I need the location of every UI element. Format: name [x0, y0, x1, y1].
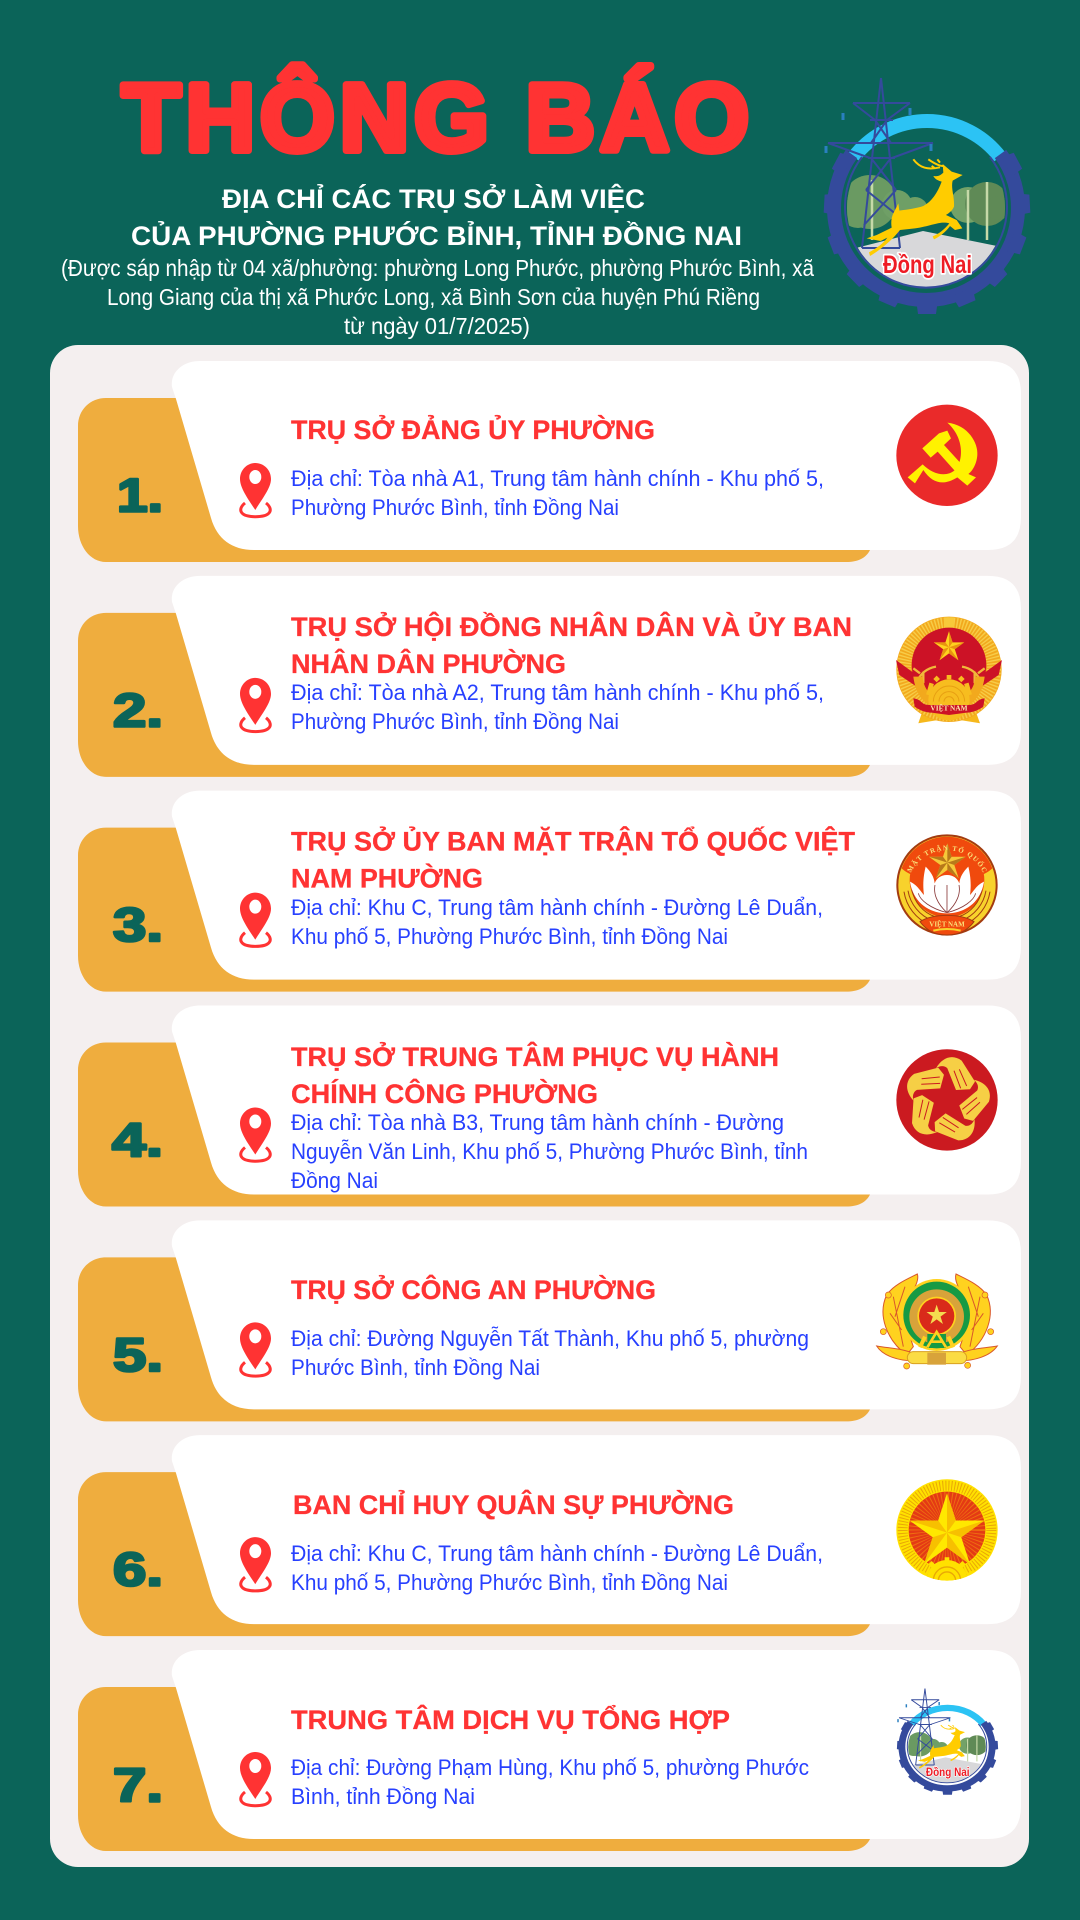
card 5: TRỤ SỞ CÔNG AN PHƯỜNG [291, 1273, 656, 1305]
card 2: Phường Phước Bình, tỉnh Đồng Nai [291, 709, 619, 734]
card 6: BAN CHỈ HUY QUÂN SỰ PHƯỜNG [293, 1488, 734, 1520]
card 4: CHÍNH CÔNG PHƯỜNG [291, 1078, 598, 1109]
card 3: TRỤ SỞ ỦY BAN MẶT TRẬN TỔ QUỐC VIỆT [291, 825, 855, 857]
note text: (Được sáp nhập từ 04 xã/phường: phường Long Phước, phường Phước Bình, xã [61, 255, 814, 281]
card 4: Địa chỉ: Tòa nhà B3, Trung tâm hành chính - Đường [291, 1110, 784, 1135]
subtitle [131, 184, 742, 251]
card 5 [78, 1220, 1021, 1421]
icon: Dong Nai logo [824, 78, 1030, 314]
card 7: 7. [113, 1758, 163, 1812]
card 6 [78, 1435, 1021, 1636]
card 2: 2. [113, 683, 163, 736]
card 1: Địa chỉ: Tòa nhà A1, Trung tâm hành chính - Khu phố 5, [291, 466, 824, 491]
note text: Long Giang của thị xã Phước Long, xã Bình Sơn của huyện Phú Riềng [107, 284, 760, 310]
card 2 [78, 576, 1021, 777]
icon: national emblem [896, 617, 1002, 723]
icon: small Dong Nai logo: Đồng Nai [926, 1766, 970, 1779]
card 6: Địa chỉ: Khu C, Trung tâm hành chính - Đường Lê Duẩn, [291, 1541, 823, 1566]
card 3: 3. [113, 898, 163, 951]
card 3 [78, 790, 1021, 992]
card 5: Địa chỉ: Đường Nguyễn Tất Thành, Khu phố 5, phường [291, 1326, 809, 1351]
icon: public service hands emblem [896, 1049, 998, 1151]
card 3: NAM PHƯỜNG [291, 863, 483, 894]
card 1: 1. [117, 468, 163, 522]
icon: national emblem: VIỆT NAM [930, 704, 968, 713]
card 6: 6. [113, 1543, 163, 1596]
subtitle: ĐỊA CHỈ CÁC TRỤ SỞ LÀM VIỆC [222, 184, 645, 214]
icon: police emblem [877, 1274, 997, 1369]
card 5: Phước Bình, tỉnh Đồng Nai [291, 1355, 540, 1380]
card 3: Khu phố 5, Phường Phước Bình, tỉnh Đồng Nai [291, 924, 728, 949]
note text: từ ngày 01/7/2025) [344, 313, 530, 339]
card 5: 5. [113, 1328, 163, 1381]
icon: party emblem [896, 405, 998, 506]
panel: locations [50, 345, 1029, 1867]
card 1: TRỤ SỞ ĐẢNG ỦY PHƯỜNG [291, 413, 655, 445]
card 4: Nguyễn Văn Linh, Khu phố 5, Phường Phước Bình, tỉnh [291, 1139, 808, 1164]
card 7: Địa chỉ: Đường Phạm Hùng, Khu phố 5, phường Phước [291, 1755, 809, 1780]
card 6: Khu phố 5, Phường Phước Bình, tỉnh Đồng Nai [291, 1570, 728, 1595]
card 1 [78, 361, 1021, 562]
card 7 [78, 1650, 1021, 1851]
card 1: Phường Phước Bình, tỉnh Đồng Nai [291, 495, 619, 520]
icon: fatherland front emblem: MẶT TRẬN TỔ QUỐC [906, 844, 987, 873]
card 4 [78, 1006, 1021, 1206]
card 7: TRUNG TÂM DỊCH VỤ TỔNG HỢP [291, 1704, 730, 1735]
subtitle: CỦA PHƯỜNG PHƯỚC BỈNH, TỈNH ĐỒNG NAI [131, 221, 742, 251]
card 2: Địa chỉ: Tòa nhà A2, Trung tâm hành chính - Khu phố 5, [291, 680, 824, 705]
icon: fatherland front emblem [896, 834, 998, 936]
icon: Dong Nai logo: Đồng Nai [883, 251, 972, 279]
card 7: Bình, tỉnh Đồng Nai [291, 1784, 475, 1809]
icon: small Dong Nai logo [897, 1688, 998, 1795]
card 2: TRỤ SỞ HỘI ĐỒNG NHÂN DÂN VÀ ỦY BAN [291, 610, 852, 642]
note text [61, 255, 814, 339]
card 2: NHÂN DÂN PHƯỜNG [291, 648, 566, 679]
icon: fatherland front emblem: VIỆT NAM [929, 921, 965, 929]
card 4: Đồng Nai [291, 1168, 378, 1193]
card 4: 4. [112, 1113, 163, 1166]
icon: military emblem [896, 1479, 998, 1581]
title: THÔNG BÁO [122, 64, 749, 172]
card 3: Địa chỉ: Khu C, Trung tâm hành chính - Đường Lê Duẩn, [291, 895, 823, 920]
card 4: TRỤ SỞ TRUNG TÂM PHỤC VỤ HÀNH [291, 1040, 779, 1072]
